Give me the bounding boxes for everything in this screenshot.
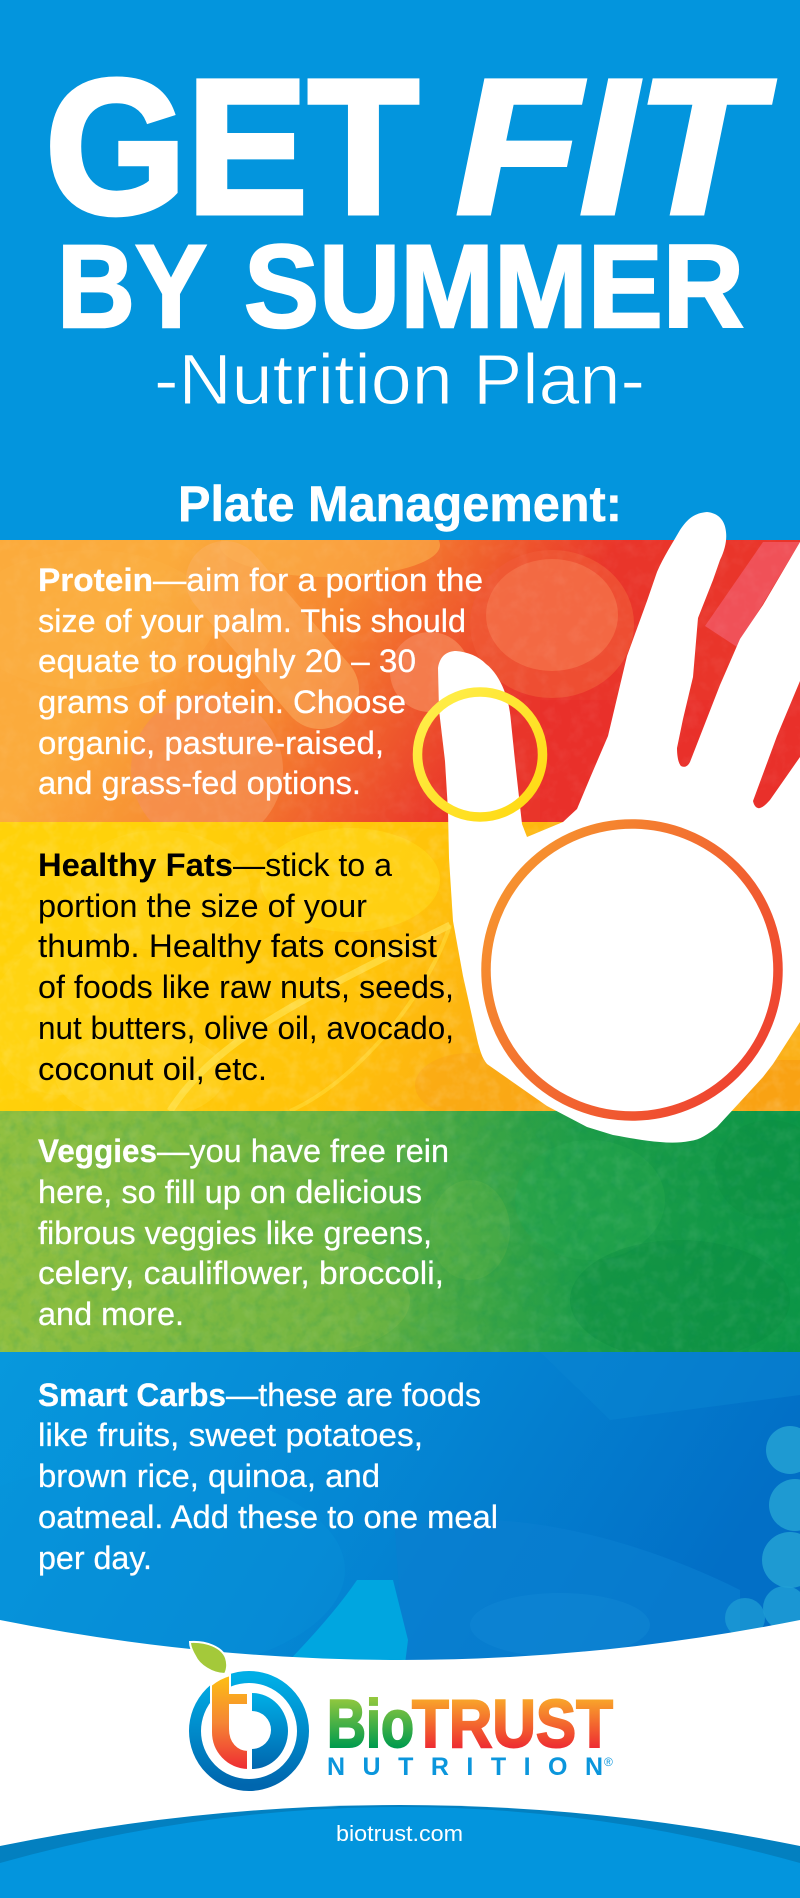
text: healthy fats: Healthy Fats: [38, 847, 233, 883]
text: protein: [38, 562, 483, 801]
title: by summer: SUMMER: [244, 221, 744, 353]
text: healthy fats: thumb. Healthy fats consist: [38, 928, 437, 964]
logo wordmark: biotrust: [327, 1686, 613, 1762]
text: healthy fats: nut butters, olive oil, avocado,: [38, 1010, 454, 1046]
text: veggies: and more.: [38, 1296, 184, 1332]
heading: plate management: Plate Management:: [178, 476, 622, 532]
text: healthy fats: coconut oil, etc.: [38, 1051, 267, 1087]
text: veggies: celery, cauliflower, broccoli,: [38, 1255, 444, 1291]
title: get fit: [45, 39, 774, 254]
footer: dark blue arc: [0, 1805, 800, 1898]
text: protein: equate to roughly 20 – 30: [38, 643, 416, 679]
logo icon: ring and letters: [190, 1642, 303, 1785]
logo wordmark: nutrition: ®: [604, 1755, 613, 1769]
logo: biotrust nutrition: [190, 1642, 613, 1785]
text: protein: size of your palm. This should: [38, 603, 466, 639]
band: healthy fats background: [0, 822, 800, 1120]
text: healthy fats: of foods like raw nuts, seeds,: [38, 969, 454, 1005]
icon: orange palm ring: [486, 824, 778, 1116]
text: smart carbs: like fruits, sweet potatoes,: [38, 1417, 423, 1453]
title: get fit: GET: [45, 39, 419, 254]
footer: blue arc: [0, 1807, 800, 1898]
text: healthy fats: —stick to a: [233, 847, 392, 883]
logo wordmark: biotrust: Bio: [327, 1686, 414, 1762]
text: healthy fats: portion the size of your: [38, 888, 367, 924]
text: protein: grams of protein. Choose: [38, 684, 406, 720]
text: veggies: here, so fill up on delicious: [38, 1174, 422, 1210]
text: smart carbs: Smart Carbs: [38, 1377, 226, 1413]
band: veggies background: [0, 1111, 800, 1360]
text: veggies: [38, 1133, 449, 1332]
text: smart carbs: [38, 1377, 498, 1576]
footer url: biotrust.com: [336, 1821, 463, 1846]
logo wordmark: nutrition: NUTRITION: [327, 1753, 603, 1781]
text: protein: —aim for a portion the: [153, 562, 483, 598]
title: by summer: BY: [57, 221, 207, 353]
icon: white hand: [438, 512, 800, 1143]
text: smart carbs: —these are foods: [226, 1377, 481, 1413]
icon: yellow thumb ring: [418, 692, 542, 817]
text: protein: organic, pasture-raised,: [38, 725, 384, 761]
title: get fit: FIT: [456, 39, 774, 254]
text: protein: and grass-fed options.: [38, 765, 361, 801]
text: smart carbs: brown rice, quinoa, and: [38, 1458, 380, 1494]
text: veggies: Veggies: [38, 1133, 157, 1169]
text: smart carbs: oatmeal. Add these to one meal: [38, 1499, 498, 1535]
text: veggies: —you have free rein: [157, 1133, 449, 1169]
band: protein background: [0, 540, 800, 822]
text: healthy fats: [38, 847, 454, 1087]
panel: white footer curve: [0, 1620, 800, 1860]
text: veggies: fibrous veggies like greens,: [38, 1215, 432, 1251]
logo wordmark: biotrust: TRUST: [412, 1686, 613, 1762]
text: smart carbs: per day.: [38, 1540, 152, 1576]
text: protein: Protein: [38, 562, 153, 598]
band: smart carbs background: [198, 1352, 800, 1660]
subtitle: nutrition plan: -Nutrition Plan-: [154, 341, 645, 420]
